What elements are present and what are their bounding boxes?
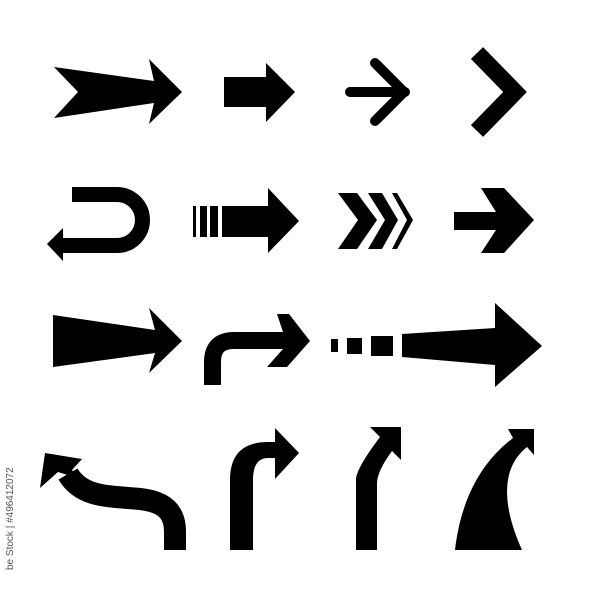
arrow: s-curve arrow xyxy=(40,453,175,550)
arrow: block arrow xyxy=(224,63,295,122)
arrow: notched long arrow xyxy=(54,59,182,124)
arrow: bend right arrow xyxy=(212,314,310,385)
caption: stock id: be Stock | #496412072 xyxy=(5,467,16,570)
arrow: angled up arrow xyxy=(356,427,401,550)
arrow: u-turn xyxy=(47,194,142,261)
arrow: dashed tail arrow xyxy=(331,303,542,387)
arrow: triple chevron xyxy=(338,193,413,249)
arrow: chevron xyxy=(477,53,515,131)
arrow: open head arrow xyxy=(454,188,534,253)
arrow: tapered arrow xyxy=(53,308,182,373)
arrow: tall bend arrow xyxy=(230,428,299,550)
arrow: wide base curved arrow xyxy=(455,429,534,550)
arrow: striped tail arrow xyxy=(193,188,299,253)
arrow: thin line arrow xyxy=(350,63,405,121)
